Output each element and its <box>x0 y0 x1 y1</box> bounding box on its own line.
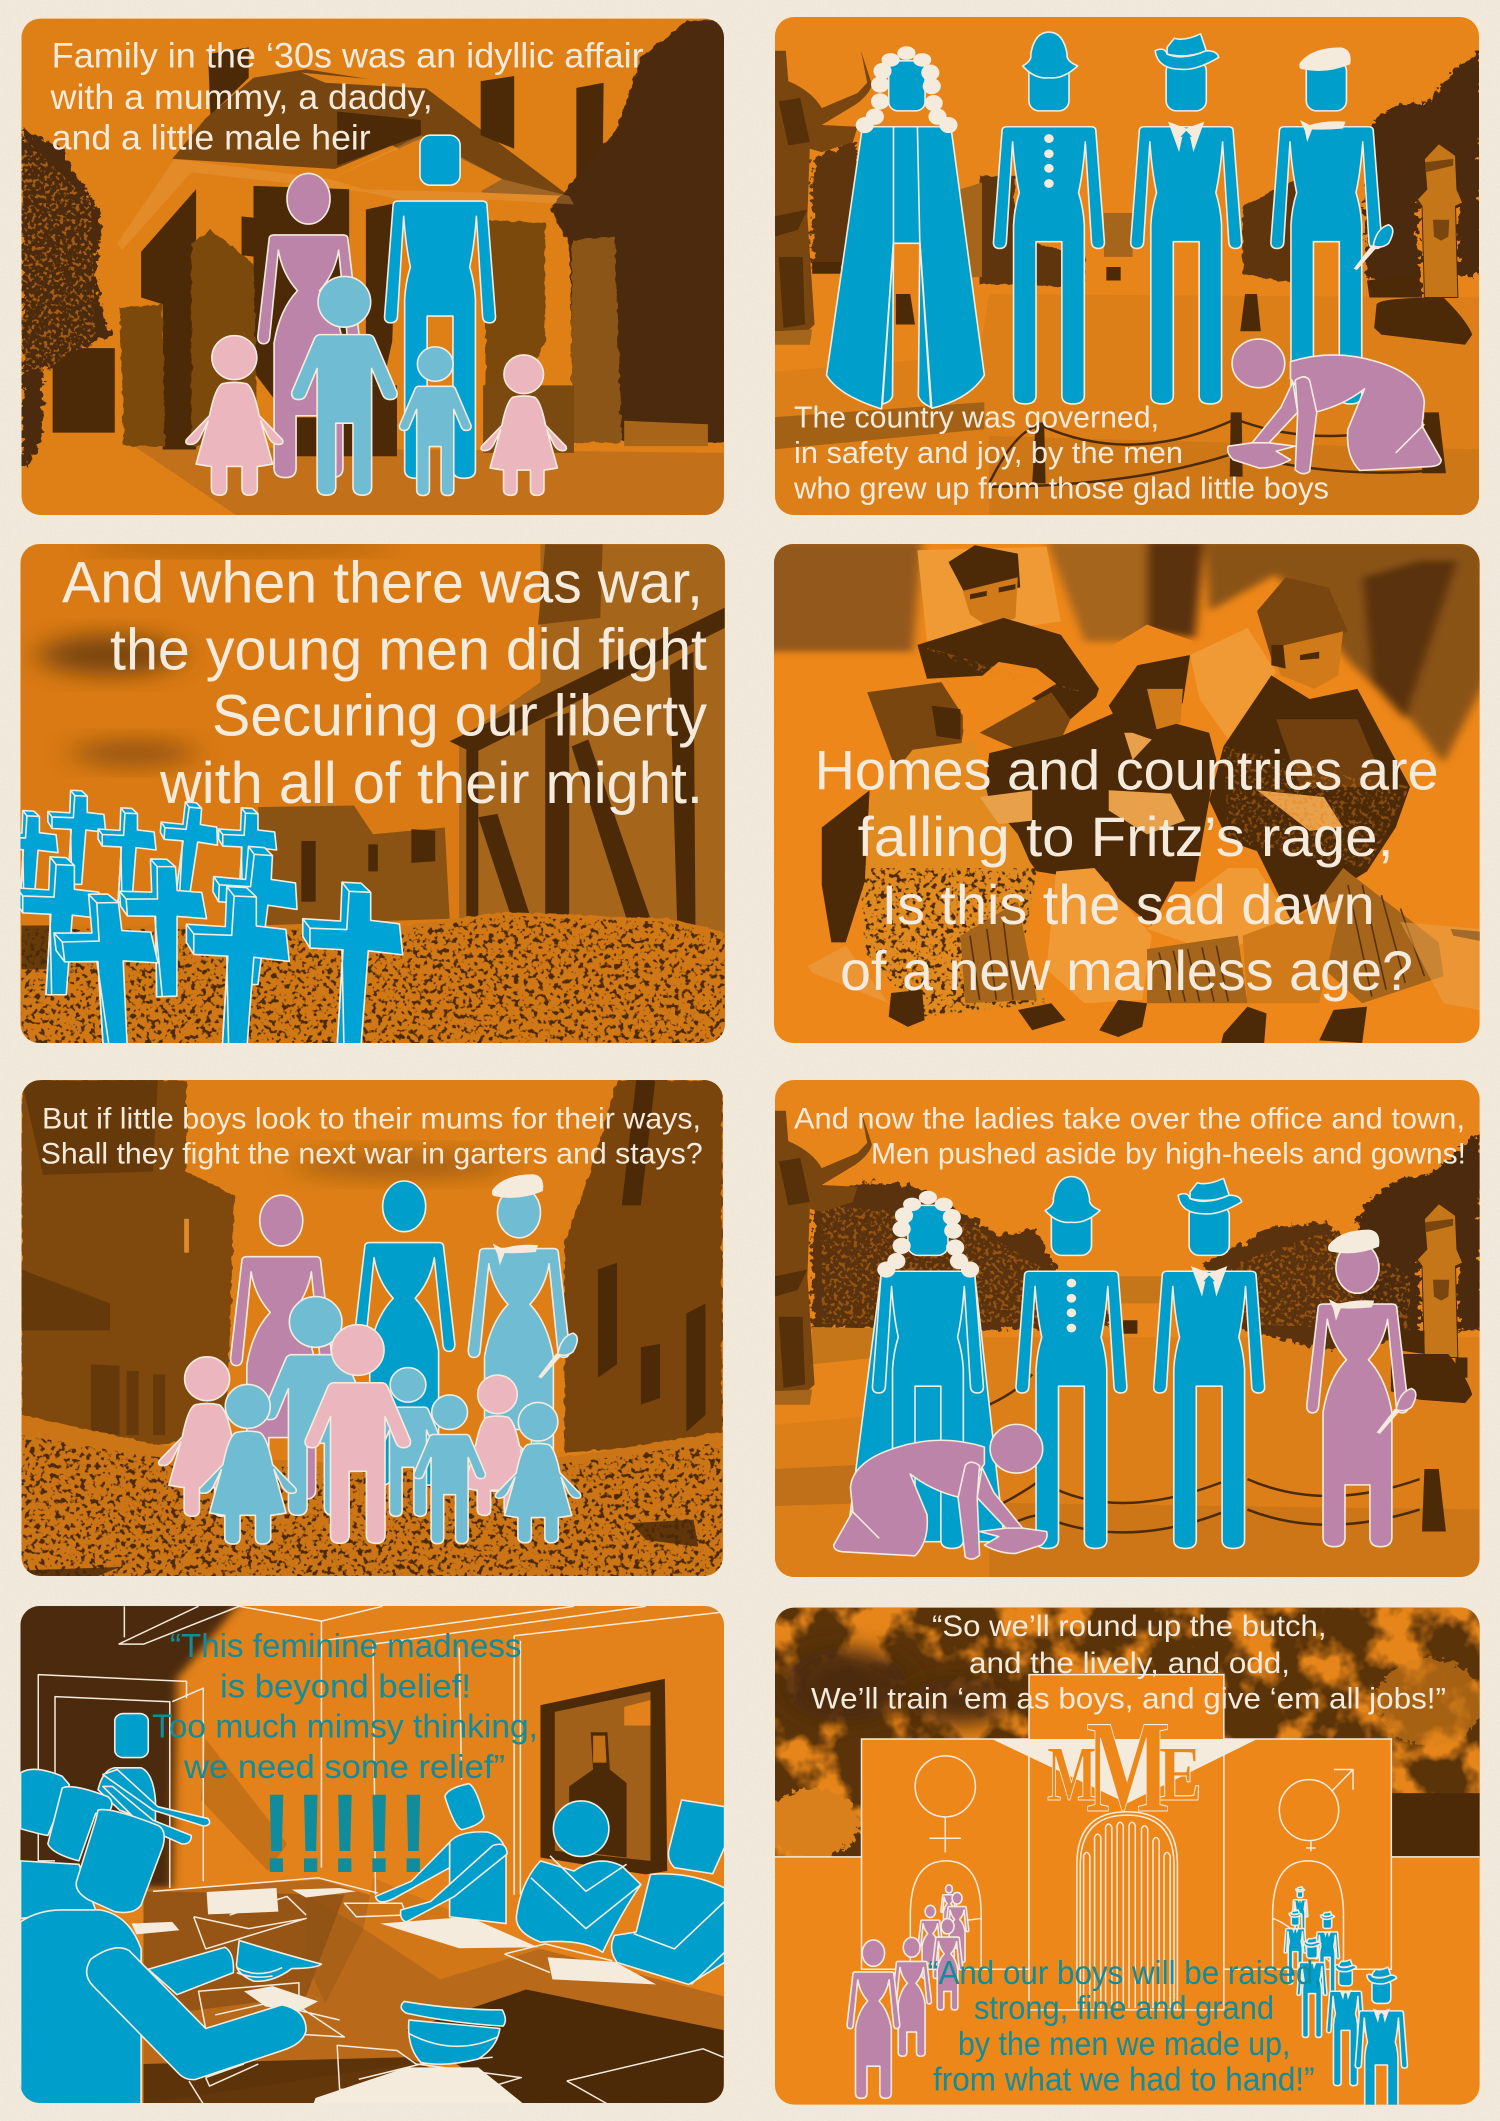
figure: boy pink <box>305 1325 410 1543</box>
photo: tree-lined avenue <box>772 1077 1484 1581</box>
text: governed caption: The country was governed, <box>794 401 1159 435</box>
figures: men around the table <box>21 1714 725 2104</box>
photo: avenue with statue <box>772 15 1484 519</box>
figures: queue of men <box>1284 1887 1407 2121</box>
text: governed caption: in safety and joy, by the men <box>794 436 1183 470</box>
text: feminine madness quote: is beyond belief! <box>220 1668 471 1704</box>
text: our boys quote: by the men we made up, <box>958 2025 1290 2062</box>
text: war caption <box>62 551 707 816</box>
diagram: room line drawing <box>38 1606 724 2104</box>
figure: judge <box>827 46 984 409</box>
photo: family house <box>19 17 727 517</box>
figure: small boy <box>372 1368 444 1516</box>
panel: ministry of men <box>764 1605 1484 2121</box>
photo: children with teddy bear <box>760 537 1496 1054</box>
figure: judge with cape <box>847 1191 1004 1548</box>
text: our boys quote <box>928 1954 1322 2097</box>
icon: field of crosses <box>20 790 404 1043</box>
text: ladies caption: Men pushed aside by high-heels and gowns! <box>871 1138 1466 1170</box>
figure: girl light blue <box>199 1384 296 1544</box>
figure: businessman <box>1154 1178 1265 1548</box>
figure: sailor <box>1271 47 1393 404</box>
text: MME crest: M <box>1047 1730 1097 1817</box>
text: homes caption: Is this the sad dawn <box>882 873 1375 936</box>
figure: woman purple <box>231 1195 332 1499</box>
figures: three women and children <box>159 1174 581 1544</box>
text: governed caption: who grew up from those glad little boys <box>793 472 1329 506</box>
text: MME crest: M <box>1086 1693 1170 1840</box>
text: homes caption: Homes and countries are <box>815 739 1439 802</box>
text: MME crest: E <box>1158 1730 1202 1817</box>
photo: cloudy sky <box>764 1605 1484 2111</box>
text: boys and mums caption: Shall they fight the next war in garters and stays? <box>41 1138 703 1170</box>
text: homes caption: falling to Fritz’s rage, <box>858 805 1394 868</box>
text: round up quote: “So we’ll round up the butch, <box>932 1610 1326 1643</box>
figure: policeman <box>1016 1177 1127 1548</box>
text: exclamation marks: !!!!! <box>262 1773 433 1894</box>
text: war caption: with all of their might. <box>159 751 703 816</box>
text: homes caption <box>815 739 1439 1002</box>
text: family caption: Family in the ‘30s was an idyllic affair <box>52 37 644 76</box>
text: round up quote: We’ll train ‘em as boys, and give ‘em all jobs!” <box>811 1682 1446 1715</box>
figure: mother <box>258 173 359 478</box>
panel: ladies take over <box>772 1077 1484 1581</box>
photo: bombed street <box>19 1079 727 1579</box>
figure: kneeling woman <box>1228 339 1441 474</box>
panel: family in the 30s <box>19 17 727 517</box>
figure: father <box>385 135 496 478</box>
figure: girl left <box>186 336 283 495</box>
figure: younger boy <box>399 347 471 496</box>
figure: woman light blue in sailor cap <box>468 1174 577 1491</box>
text: boys and mums caption <box>41 1103 703 1170</box>
panel: evacuee children <box>760 537 1496 1054</box>
figure: small girl light blue <box>495 1402 581 1543</box>
text: feminine madness quote: “This feminine madness <box>170 1627 522 1664</box>
panel: mothers and children in rubble <box>19 1079 727 1579</box>
photo: boardroom <box>10 1597 727 2108</box>
text: family caption: with a mummy, a daddy, <box>50 78 433 117</box>
figure: girl right <box>481 355 566 495</box>
text: round up quote <box>811 1610 1446 1715</box>
text: war caption: And when there was war, <box>62 551 703 616</box>
text: feminine madness quote <box>152 1627 538 1785</box>
panel: men governing the country <box>772 15 1484 519</box>
text: our boys quote: from what we had to hand!” <box>933 2060 1315 2097</box>
figure: boy light blue <box>263 1297 368 1515</box>
figure: policeman <box>993 32 1104 404</box>
text: family caption <box>50 42 644 150</box>
text: our boys quote: strong, fine and grand <box>974 1989 1274 2026</box>
figure: older boy <box>292 276 397 495</box>
text: governed caption <box>793 401 1329 506</box>
text: homes caption: of a new manless age? <box>840 939 1413 1002</box>
figure: small girl pink <box>455 1375 540 1515</box>
illustration: ministry building <box>772 1675 1482 2010</box>
text: ladies caption: And now the ladies take over the office and town, <box>794 1103 1465 1136</box>
figures: queue of women <box>847 1885 969 2098</box>
figure: woman blue <box>353 1181 455 1485</box>
figure: girl pink <box>159 1357 256 1516</box>
text: boys and mums caption: But if little boys look to their mums for their ways, <box>42 1103 701 1136</box>
text: war caption: Securing our liberty <box>212 684 707 748</box>
paper sheets on table <box>132 1888 656 2104</box>
text: war caption: the young men did fight <box>110 617 707 682</box>
text: family caption: and a little male heir <box>52 118 371 157</box>
text: round up quote: and the lively, and odd, <box>969 1647 1290 1680</box>
photo: ruined building <box>19 540 727 1044</box>
figure: woman in sailor cap <box>1307 1230 1416 1547</box>
panel: boardroom meeting <box>10 1597 727 2108</box>
text: feminine madness quote: Too much mimsy thinking, <box>152 1708 538 1745</box>
figure: small boy front <box>414 1395 485 1544</box>
figure: kneeling man <box>834 1424 1047 1559</box>
text: ladies caption <box>794 1103 1466 1170</box>
panel: war and crosses <box>0 540 727 1058</box>
text: feminine madness quote: we need some relief” <box>183 1748 505 1785</box>
text: our boys quote: “And our boys will be raised, <box>928 1954 1322 1991</box>
figure: businessman <box>1131 34 1242 404</box>
